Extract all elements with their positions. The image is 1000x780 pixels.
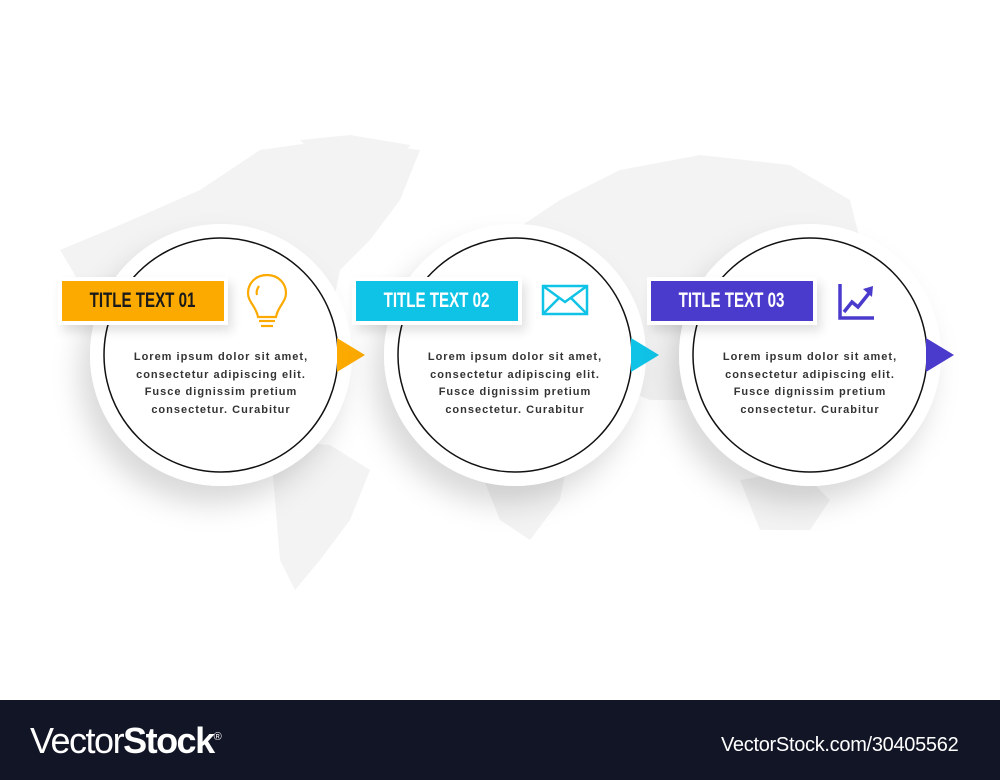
footer — [0, 700, 1000, 780]
body text 1: Fusce dignissim pretium — [145, 386, 297, 398]
body text 2 — [428, 351, 602, 416]
title 1: TITLE TEXT 01 — [90, 289, 196, 312]
body text 3: Lorem ipsum dolor sit amet, — [723, 351, 897, 363]
title 1 — [58, 277, 228, 325]
body text 1: consectetur. Curabitur — [151, 404, 291, 416]
body text 1: consectetur adipiscing elit. — [136, 368, 306, 380]
body text 1: Lorem ipsum dolor sit amet, — [134, 351, 308, 363]
body text 2: consectetur adipiscing elit. — [430, 368, 600, 380]
body text 2: Lorem ipsum dolor sit amet, — [428, 351, 602, 363]
title 2: TITLE TEXT 02 — [384, 289, 490, 312]
body text 2: consectetur. Curabitur — [445, 404, 585, 416]
title 3: TITLE TEXT 03 — [679, 289, 785, 312]
footer logo: VectorStock® — [30, 720, 220, 761]
icon: growth chart — [838, 284, 874, 320]
icon: lightbulb — [246, 274, 288, 328]
body text 2: Fusce dignissim pretium — [439, 386, 591, 398]
title 2 — [352, 277, 522, 325]
icon: envelope — [542, 284, 588, 316]
footer url: VectorStock.com/30405562 — [721, 734, 958, 756]
title 3 — [647, 277, 817, 325]
body text 3: consectetur. Curabitur — [740, 404, 880, 416]
body text 3 — [723, 351, 897, 416]
body text 1 — [134, 351, 308, 416]
body text 3: consectetur adipiscing elit. — [725, 368, 895, 380]
body text 3: Fusce dignissim pretium — [734, 386, 886, 398]
